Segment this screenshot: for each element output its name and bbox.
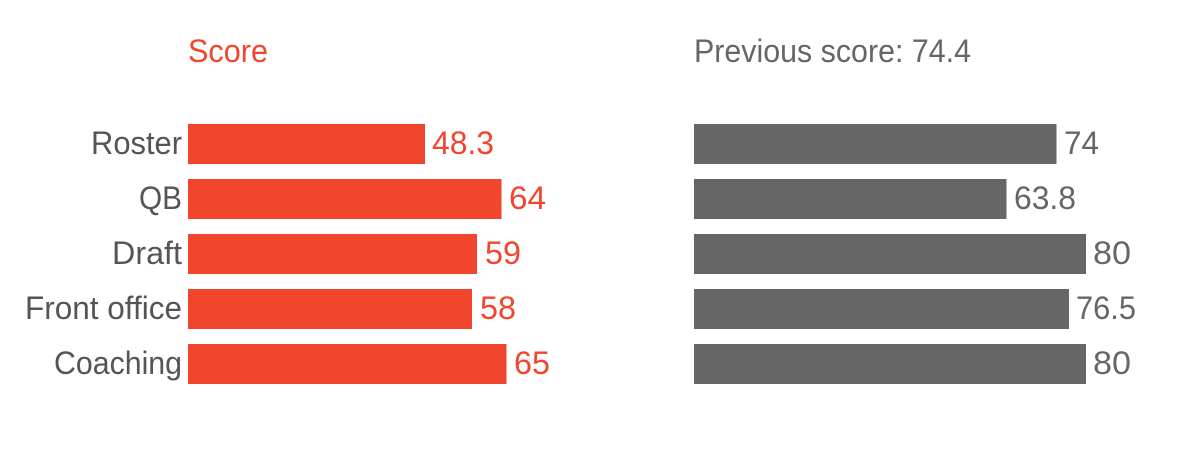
bar chart: previous score: 63.8 <box>1014 180 1076 216</box>
row labels: QB <box>139 180 182 216</box>
bar chart: previous score <box>694 124 1136 384</box>
bar chart: previous score: 74 <box>1064 125 1099 161</box>
row labels: Roster <box>91 125 182 161</box>
row labels: Draft <box>112 235 182 271</box>
bar chart: score: 48.3 <box>432 125 494 161</box>
heading: Score: Score <box>188 33 268 69</box>
heading: Previous score: Previous score: 74.4 <box>694 33 971 69</box>
bar chart: score: 59 <box>485 235 521 271</box>
bar chart: previous score: 80 <box>1093 235 1131 271</box>
row labels: Coaching <box>54 345 182 381</box>
bar chart: score: 64 <box>509 180 546 216</box>
bar chart: score <box>188 124 550 384</box>
bar chart: score: 65 <box>514 345 550 381</box>
row labels: Front office <box>25 290 182 326</box>
bar chart: previous score: 76.5 <box>1076 290 1136 326</box>
row labels <box>25 125 182 381</box>
bar chart: previous score: 80 <box>1093 345 1131 381</box>
bar chart: score: 58 <box>480 290 516 326</box>
